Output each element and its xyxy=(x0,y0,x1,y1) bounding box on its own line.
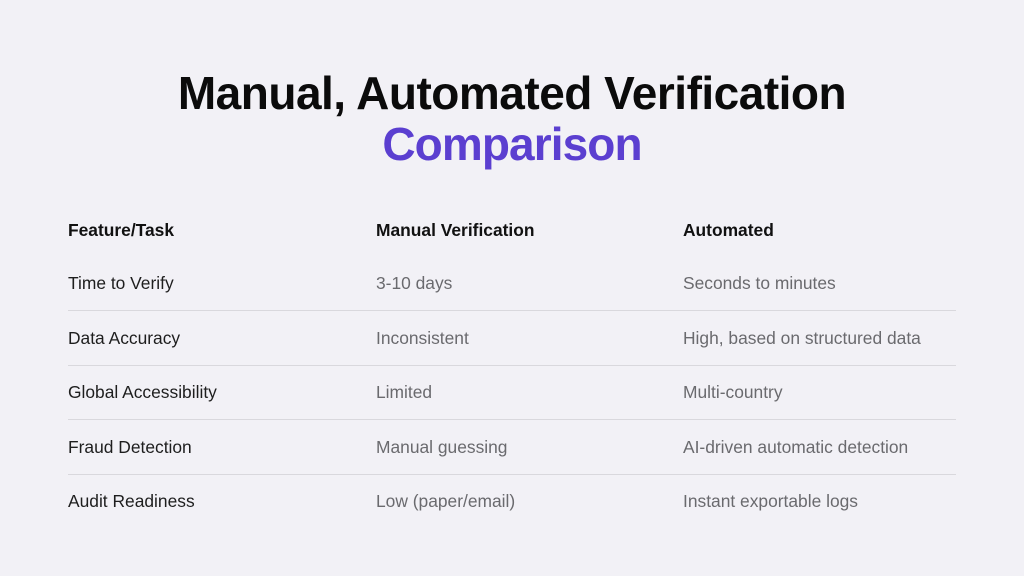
table: Manual Verification xyxy=(376,220,534,240)
table: Audit Readiness xyxy=(68,491,195,511)
table: Low (paper/email) xyxy=(376,491,515,511)
row: time xyxy=(68,273,836,293)
table: Time to Verify xyxy=(68,273,174,293)
table: Seconds to minutes xyxy=(683,273,836,293)
table: Instant exportable logs xyxy=(683,491,858,511)
header row xyxy=(68,220,774,240)
table: Global Accessibility xyxy=(68,382,217,402)
table: Automated xyxy=(683,220,774,240)
table: Limited xyxy=(376,382,432,402)
table: 3-10 days xyxy=(376,273,452,293)
table: Inconsistent xyxy=(376,328,469,348)
table: Data Accuracy xyxy=(68,328,180,348)
row: accuracy xyxy=(68,328,921,348)
table: AI-driven automatic detection xyxy=(683,437,908,457)
table: Manual guessing xyxy=(376,437,507,457)
table: High, based on structured data xyxy=(683,328,921,348)
table: Fraud Detection xyxy=(68,437,192,457)
row: accessibility xyxy=(68,382,783,402)
subtitle: Comparison xyxy=(382,118,642,170)
title: Manual, Automated Verification xyxy=(178,67,846,119)
row: fraud xyxy=(68,437,908,457)
row: audit xyxy=(68,491,858,511)
table: Feature/Task xyxy=(68,220,174,240)
table: Multi-country xyxy=(683,382,783,402)
